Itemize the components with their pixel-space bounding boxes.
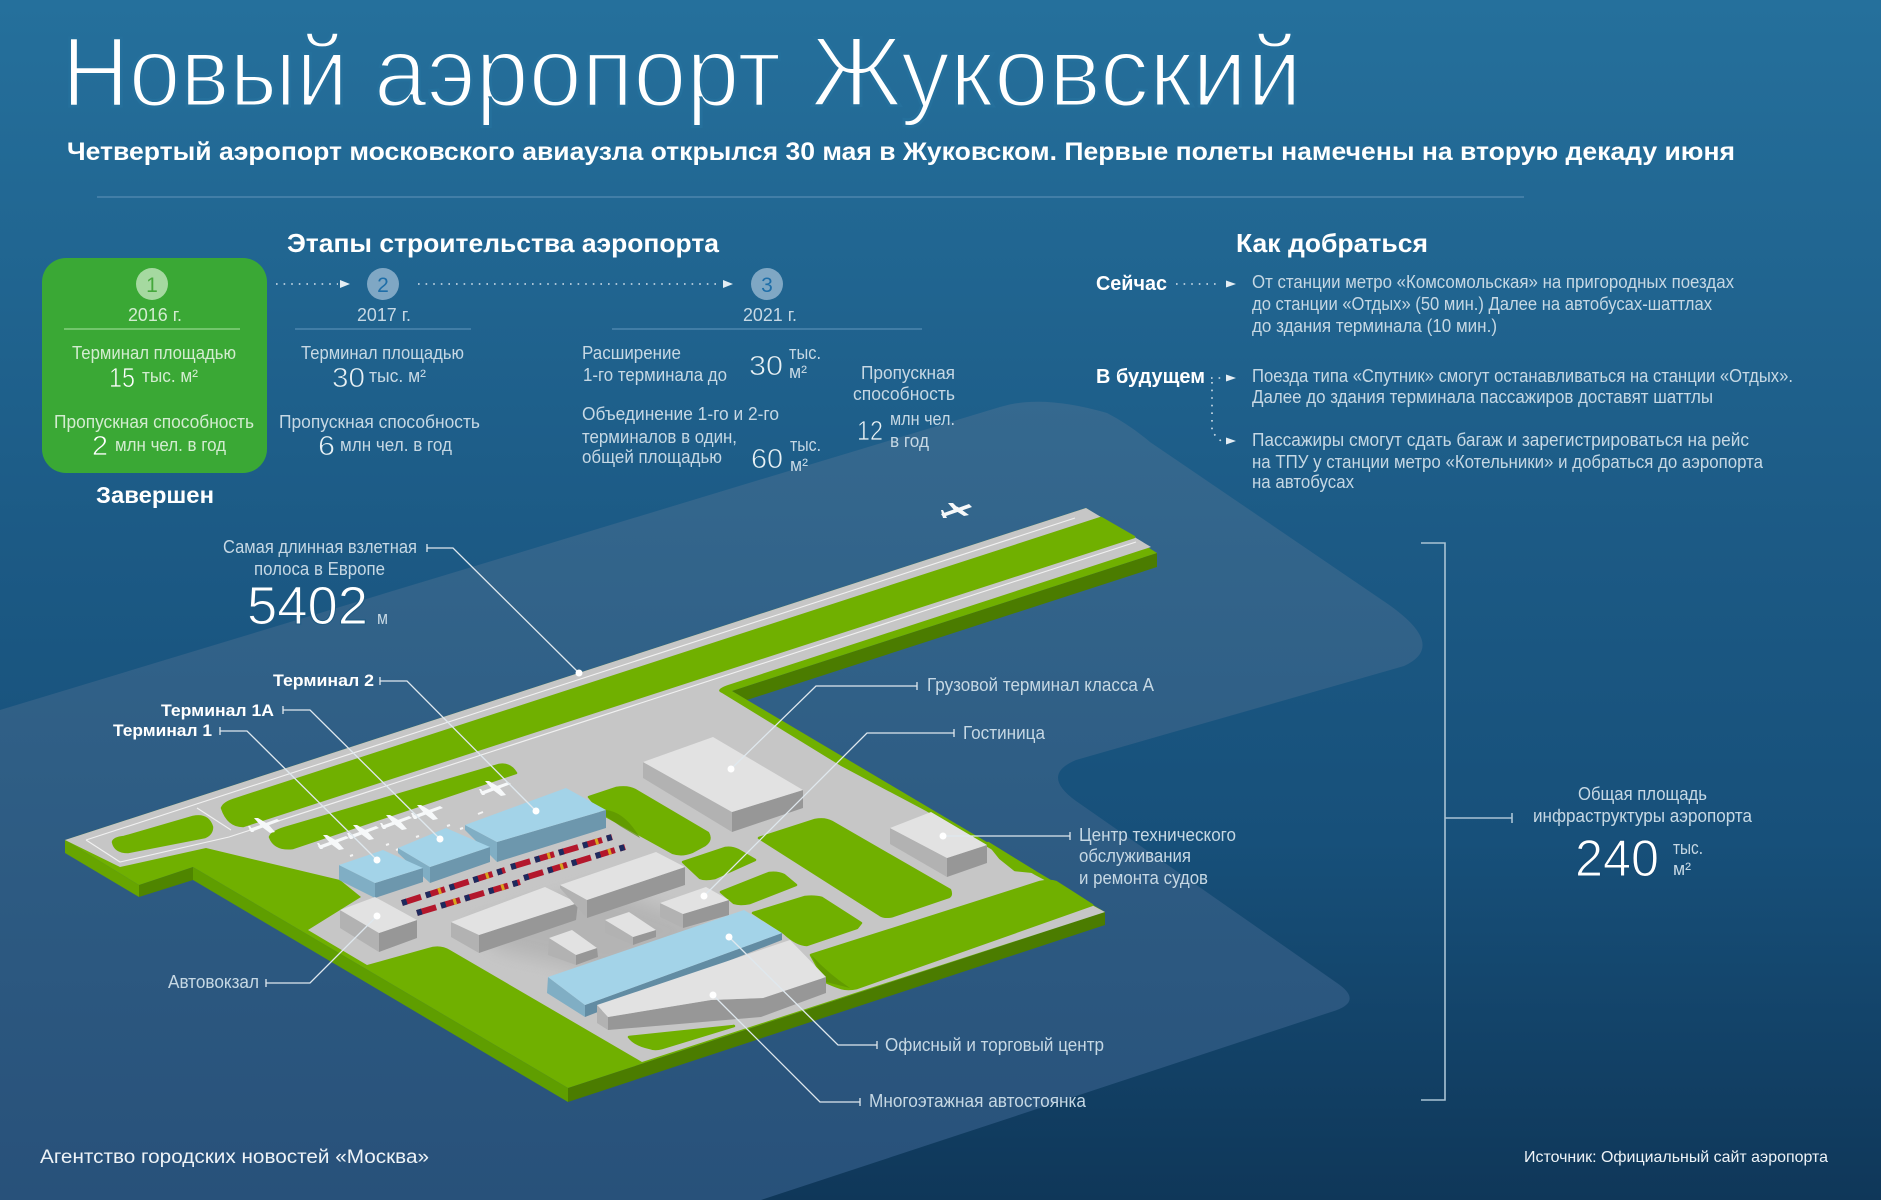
text: future option 1 (1252, 366, 1793, 407)
stage 1 card: 15 (109, 362, 135, 393)
building: small 1 (548, 930, 598, 965)
stage 3 column: 60 (751, 443, 783, 474)
callout: total area: тыс. (1673, 838, 1703, 858)
building: maintenance centre (890, 812, 987, 877)
stage 2 column: 6 (318, 430, 335, 461)
building: office and retail centre (547, 910, 782, 1017)
stage 1 card: 1 (146, 274, 158, 297)
callout: maintenance centre (940, 825, 1236, 888)
callout: terminal 1A (161, 701, 444, 842)
text: now route (1252, 272, 1734, 336)
callout: longest runway: Самая длинная взлетная (223, 537, 417, 557)
stage 3 column: в год (890, 431, 929, 451)
building: terminal 1 (339, 850, 423, 898)
stage 1 card: 2 (92, 430, 108, 461)
stage 3 column: 3 (761, 274, 773, 297)
panel: how to get there (1096, 228, 1793, 492)
stage 2 column: Пропускная способность (279, 412, 480, 432)
stage 3 column: Объединение 1-го и 2-го (582, 404, 779, 424)
stage 3 column: Пропускная (861, 363, 955, 383)
callout: hotel (700, 723, 1046, 900)
callout: terminal 1 (113, 721, 380, 864)
stage 3 column: способность (853, 384, 955, 404)
callout: longest runway (223, 537, 582, 676)
stage 1 card (42, 258, 267, 473)
arrows: future (1211, 374, 1236, 444)
stage 3 column: тыс. (790, 435, 821, 455)
callout: longest runway: полоса в Европе (254, 559, 385, 579)
stage 2 column: 2 (377, 274, 389, 297)
icon: airplane in flight (941, 503, 972, 518)
green lawns (113, 518, 1134, 1049)
callout: terminal 1: Терминал 1 (113, 721, 212, 740)
building: multi-storey car park (597, 940, 826, 1030)
credit: agency: Агентство городских новостей «Москва» (40, 1146, 429, 1168)
callout: total area: инфраструктуры аэропорта (1533, 806, 1753, 826)
callout: maintenance centre: обслуживания (1079, 846, 1191, 866)
title: аэропорт (374, 16, 781, 127)
arrow: stage 1 to 2 (276, 280, 350, 288)
credit: source: Источник: Официальный сайт аэропорта (1524, 1149, 1828, 1166)
callout: office and retail centre (726, 934, 1104, 1055)
ground side faces (65, 553, 1157, 1102)
stage 2 column (279, 268, 480, 461)
stage 1 card: млн чел. в год (115, 435, 226, 455)
text: future option 2 (1252, 430, 1764, 492)
text: now route: до станции «Отдых» (50 мин.) Далее на автобусах-шаттлах (1252, 294, 1712, 314)
stage 1 card: Пропускная способность (54, 412, 254, 432)
callout: maintenance centre: и ремонта судов (1079, 868, 1208, 888)
lawn shadows (600, 810, 850, 988)
stage 3 column: терминалов в один, (582, 427, 737, 447)
paved surface (65, 508, 1151, 1062)
heading: how to get there: Как добраться (1236, 228, 1428, 258)
stage 2 column: млн чел. в год (340, 435, 452, 455)
building: terminal 1A (398, 828, 490, 883)
building: block 2 (560, 852, 685, 918)
callout: total area: Общая площадь (1578, 784, 1707, 804)
callout: cargo terminal (728, 675, 1154, 772)
label: now: Сейчас (1096, 273, 1167, 295)
callout: total area: м² (1673, 859, 1691, 879)
building: hotel (660, 887, 729, 928)
title: Новый (62, 16, 348, 127)
stage 3 column: 2021 г. (743, 305, 797, 325)
stage 3 column: 12 (857, 415, 883, 446)
subtitle: Четвертый аэропорт московского авиаузла открылся 30 мая в Жуковском. Первые полеты намечены на вторую декаду июня (67, 138, 1735, 166)
stage 1 card: Терминал площадью (72, 343, 236, 363)
building: cargo terminal (643, 737, 803, 832)
arrow: now (1176, 280, 1236, 288)
status: completed: Завершен (96, 482, 214, 508)
stage 2 column: 2017 г. (357, 305, 411, 325)
callout: car park (710, 992, 1087, 1111)
title (62, 16, 1302, 127)
stage 3 column: 30 (749, 350, 783, 381)
callout: cargo terminal: Грузовой терминал класса А (927, 675, 1154, 695)
ground top (65, 508, 1157, 1088)
stage 2 column: тыс. м² (369, 366, 426, 386)
stage 3 column: тыс. (789, 343, 821, 363)
building: block 1 (451, 887, 578, 953)
callout: maintenance centre: Центр технического (1079, 825, 1236, 845)
stage 3 column (582, 268, 955, 475)
callout: office and retail centre: Офисный и торговый центр (885, 1035, 1104, 1055)
callout: terminal 1A: Терминал 1А (161, 701, 274, 720)
callout: longest runway: м (377, 608, 388, 628)
central shading (470, 885, 720, 975)
text: future option 1: Поезда типа «Спутник» смогут останавливаться на станции «Отдых». (1252, 366, 1793, 386)
callout: total area: 240 (1575, 830, 1659, 888)
label: future: В будущем (1096, 366, 1205, 388)
stage 3 column: Расширение (582, 343, 681, 363)
runway markings (86, 518, 1136, 862)
stage 3 column: млн чел. (890, 409, 955, 429)
title: Жуковский (811, 16, 1302, 127)
airport isometric map (65, 503, 1157, 1102)
callout: longest runway: 5402 (247, 576, 368, 636)
callout: total area (1533, 784, 1753, 888)
panel: construction stages (42, 228, 955, 508)
bracket: total infrastructure (1421, 543, 1512, 1100)
callout: bus station (168, 912, 380, 992)
text: now route: От станции метро «Комсомольская» на пригородных поездах (1252, 272, 1734, 292)
callout: terminal 2: Терминал 2 (273, 671, 374, 690)
jet bridges (350, 812, 483, 856)
callout: car park: Многоэтажная автостоянка (869, 1091, 1087, 1111)
stage 2 column: 30 (332, 362, 365, 393)
stage 2 column: Терминал площадью (301, 343, 464, 363)
text: future option 2: на ТПУ у станции метро «Котельники» и добраться до аэропорта (1252, 452, 1764, 472)
building: small 2 (605, 912, 656, 945)
stage 3 column: общей площадью (582, 447, 722, 467)
building: bus station (340, 897, 417, 952)
stage 1 card: тыс. м² (142, 366, 198, 386)
airplanes on apron (248, 781, 511, 850)
stage 3 column: м² (789, 362, 807, 382)
callout: hotel: Гостиница (963, 723, 1046, 743)
arrow: stage 2 to 3 (418, 280, 733, 288)
text: future option 2: на автобусах (1252, 472, 1354, 492)
building: terminal 2 (465, 788, 606, 862)
callout: terminal 2 (273, 671, 540, 814)
text: future option 1: Далее до здания терминала пассажиров доставят шаттлы (1252, 387, 1713, 407)
text: future option 2: Пассажиры смогут сдать багаж и зарегистрироваться на рейс (1252, 430, 1749, 450)
text: now route: до здания терминала (10 мин.) (1252, 316, 1497, 336)
car parking rows (402, 837, 625, 913)
stage 3 column: м² (790, 455, 808, 475)
heading: stages: Этапы строительства аэропорта (287, 228, 720, 258)
callout: bus station: Автовокзал (168, 972, 259, 992)
stage 1 card: 2016 г. (128, 305, 182, 325)
stage 3 column: 1-го терминала до (583, 365, 727, 385)
